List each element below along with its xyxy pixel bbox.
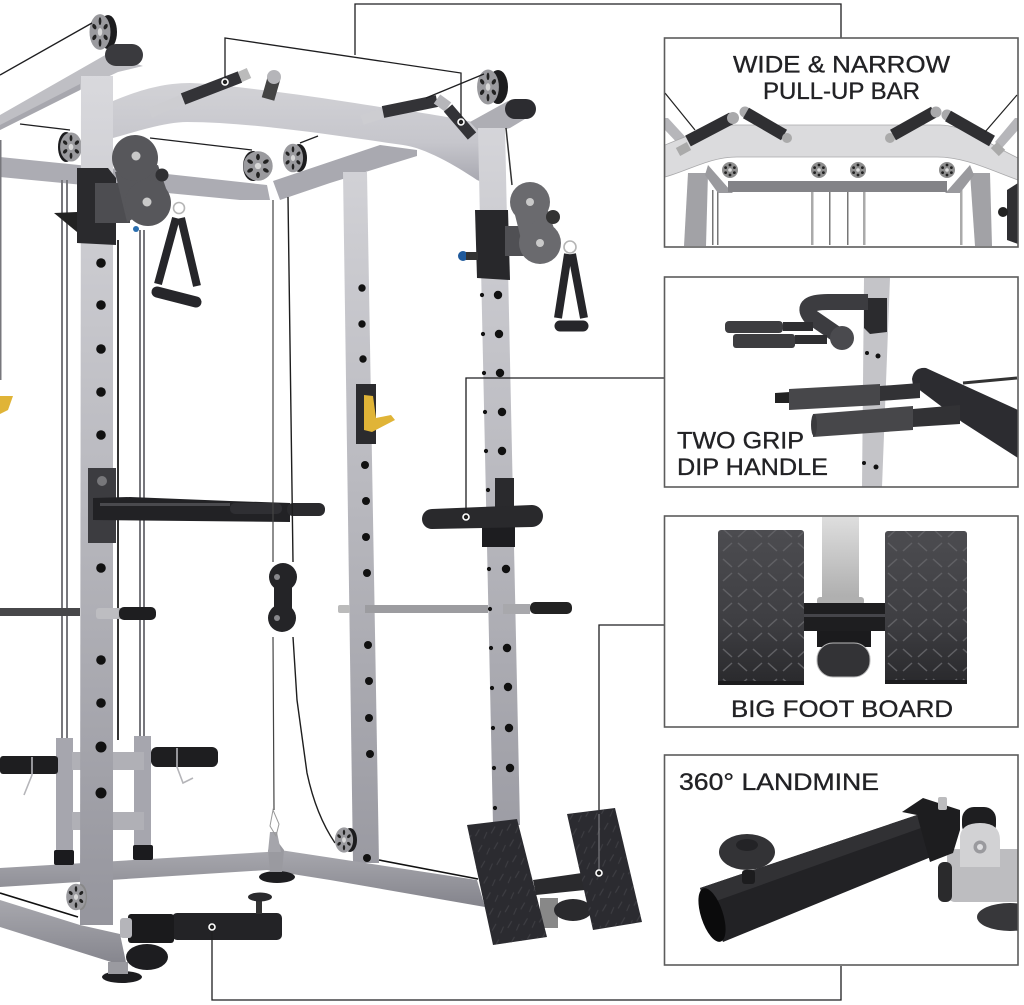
detail photo: pull-up bar xyxy=(665,93,1018,246)
heading: 360 landmine: 360° LANDMINE xyxy=(679,769,879,796)
right post xyxy=(478,128,520,825)
heading: two grip dip handle: TWO GRIP xyxy=(677,428,804,454)
front left post xyxy=(80,76,113,925)
left pulley carriage xyxy=(54,135,171,245)
base bars xyxy=(0,842,485,983)
rear pulleys xyxy=(58,132,307,181)
pull-up grips on frame xyxy=(150,70,472,136)
detail photo: landmine xyxy=(693,797,1024,945)
pull-up crossbar xyxy=(113,83,482,182)
right dip handle xyxy=(422,478,543,547)
panel: two grip dip handle xyxy=(664,277,1018,487)
callout: foot board leader xyxy=(596,625,665,876)
detail photo: foot board xyxy=(718,517,967,685)
left barbell sleeve on post xyxy=(96,608,118,619)
heading: wide and narrow pull-up bar xyxy=(733,52,950,105)
landmine attachment xyxy=(120,892,282,970)
right D-handle xyxy=(558,241,584,326)
top cap right xyxy=(505,99,536,119)
top pulley left xyxy=(90,14,117,50)
guide rods xyxy=(0,140,145,740)
cables and hanging pulleys xyxy=(66,197,357,910)
lower left weight stack uprights xyxy=(0,736,218,865)
heading: two grip dip handle xyxy=(677,428,828,481)
back post xyxy=(343,172,379,863)
back top crossbars xyxy=(0,145,417,200)
callout: pull-up bar leader xyxy=(0,4,841,150)
heading: wide and narrow pull-up bar: WIDE & NARROW xyxy=(733,52,950,78)
foot board assembly xyxy=(467,808,642,945)
panel: wide and narrow pull-up bar xyxy=(664,38,1018,247)
heading: two grip dip handle: DIP HANDLE xyxy=(677,454,828,481)
left barbell rod xyxy=(0,607,156,620)
top cap left xyxy=(105,44,143,66)
left D-handle xyxy=(157,202,197,302)
callout: dip handle leader xyxy=(463,378,665,520)
detail photo: dip handle xyxy=(725,278,1018,487)
hook fragment at left edge xyxy=(0,396,13,414)
rack illustration xyxy=(0,14,642,983)
panel: big foot board xyxy=(664,516,1018,727)
top pulley right xyxy=(477,70,508,104)
right barbell rod xyxy=(338,602,572,614)
right pulley carriage xyxy=(458,128,561,280)
callout: landmine leader xyxy=(209,924,841,1000)
heading: wide and narrow pull-up bar: PULL-UP BAR xyxy=(763,78,920,105)
top right arm xyxy=(470,101,530,135)
left dip handle xyxy=(88,468,325,543)
top left beam xyxy=(0,54,143,130)
heading: big foot board: BIG FOOT BOARD xyxy=(731,696,953,723)
panel: 360 landmine xyxy=(664,755,1024,965)
yellow hook xyxy=(356,384,395,444)
